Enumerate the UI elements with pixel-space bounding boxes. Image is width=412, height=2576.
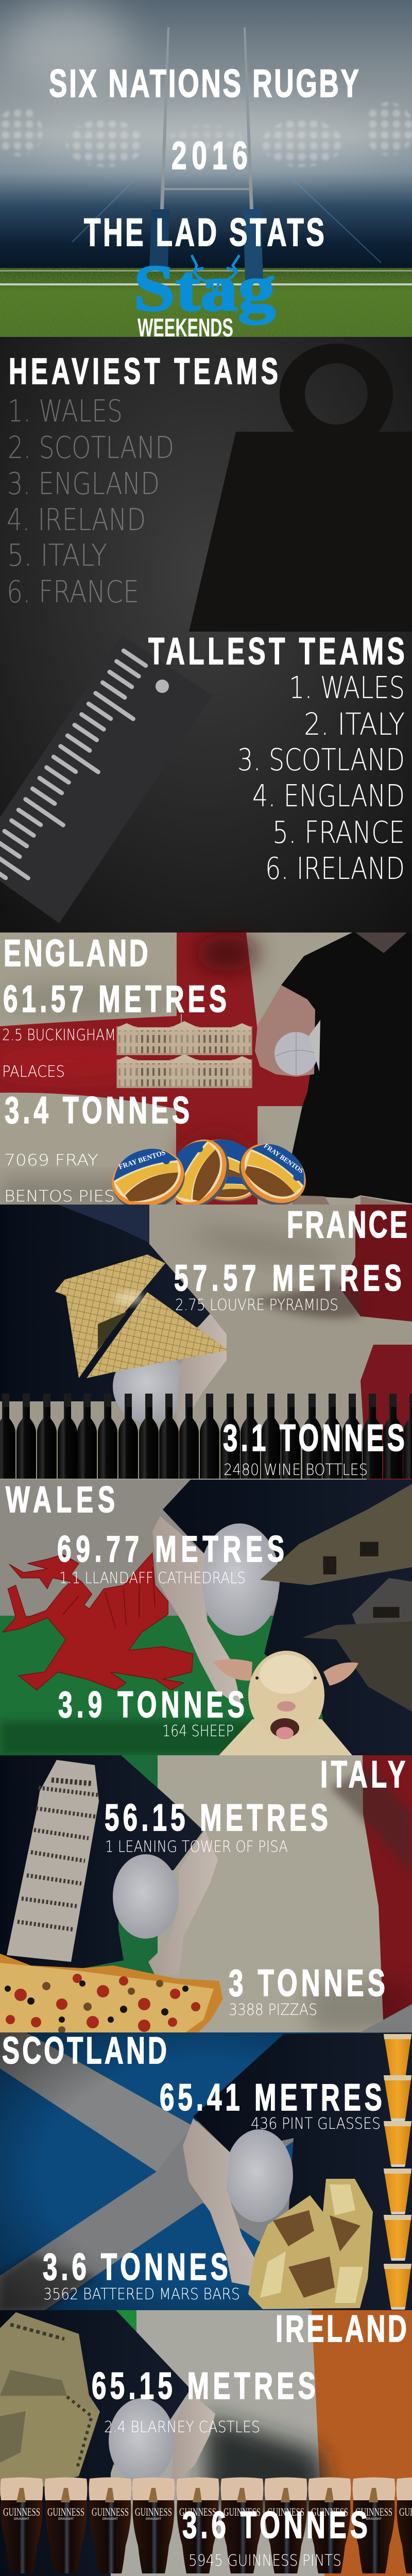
stat: height: 65.15 METRES — [92, 2365, 316, 2407]
comparison text: pyramids: 2.75 LOUVRE PYRAMIDS — [175, 1296, 338, 1314]
icon: guinness pints row: GUINNESS — [224, 2505, 261, 2518]
title: the lad stats: THE LAD STATS — [84, 211, 324, 254]
rugby player — [0, 2310, 215, 2576]
panel: heaviest and tallest teams — [0, 337, 412, 933]
stat: weight: 3.9 TONNES — [58, 1684, 245, 1725]
panel: wales — [0, 1479, 412, 1755]
icon: buckingham palaces — [116, 1014, 252, 1088]
title: six nations rugby: SIX NATIONS RUGBY — [49, 62, 359, 105]
rugby player — [183, 2032, 412, 2310]
rugby player — [0, 1205, 227, 1437]
stat: height: 61.57 METRES — [3, 978, 227, 1020]
icon: guinness pints row: DRAUGHT — [102, 2518, 118, 2521]
title: 2016: 2016 — [171, 134, 248, 177]
icon: llandaff cathedrals — [260, 1484, 412, 1712]
panel: hero stadium header — [0, 0, 412, 342]
comparison text: castles: 2.4 BLARNEY CASTLES — [104, 2418, 260, 2436]
list: heaviest teams ranking: 1. WALES — [8, 393, 123, 429]
panel: england — [0, 933, 412, 1219]
panel: italy — [0, 1754, 412, 2033]
comparison text: palaces — [2, 1026, 116, 1081]
icon: guinness pints row: GUINNESS — [355, 2505, 392, 2518]
list: heaviest teams ranking: 2. SCOTLAND — [8, 430, 174, 465]
panel: ireland — [0, 2308, 412, 2576]
icon: battered mars bars — [248, 2179, 373, 2309]
icon: guinness pints row: GUINNESS — [311, 2505, 348, 2518]
stat: height: 69.77 METRES — [57, 1529, 284, 1569]
list: heaviest teams ranking: 6. FRANCE — [7, 574, 139, 609]
heading: heaviest teams: HEAVIEST TEAMS — [9, 351, 278, 392]
list: heaviest teams ranking: 5. ITALY — [7, 537, 107, 573]
icon: pizza — [0, 1954, 223, 2033]
icon: guinness pints row — [0, 2477, 412, 2573]
panel: scotland — [0, 2004, 412, 2310]
icon: guinness pints row: GUINNESS — [267, 2505, 304, 2518]
comparison text: mars bars: 3562 BATTERED MARS BARS — [43, 2285, 240, 2303]
icon: fray bentos pies — [105, 1129, 317, 1219]
rugby player — [152, 1480, 412, 1755]
icon: sheep — [213, 1651, 358, 1755]
icon: leaning tower of pisa — [7, 1760, 99, 1962]
icon: wine bottles row — [0, 1394, 412, 1479]
icon: kettlebell weight silhouette — [189, 344, 412, 632]
heading: england: ENGLAND — [4, 933, 148, 974]
comparison text: sheep: 164 SHEEP — [162, 1722, 234, 1740]
comparison text: pizzas: 3388 PIZZAS — [229, 2001, 317, 2019]
comparison text: wine bottles: 2480 WINE BOTTLES — [224, 1461, 368, 1479]
stat: height: 56.15 METRES — [105, 1797, 328, 1839]
stat: weight: 3.4 TONNES — [5, 1090, 190, 1131]
heading: ireland: IRELAND — [276, 2308, 407, 2350]
comparison text: pies: 7069 FRAY — [4, 1151, 98, 1170]
rugby goal posts — [149, 27, 263, 281]
dark background — [0, 337, 412, 933]
grass pitch — [0, 268, 412, 337]
england flag background — [0, 933, 412, 1205]
comparison text: guinness pints: 5945 GUINNESS PINTS — [188, 2552, 341, 2570]
icon: blarney castles — [0, 2312, 100, 2496]
stat: weight: 3.1 TONNES — [223, 1417, 405, 1459]
logo: stag weekends: WEEKENDS — [138, 313, 233, 342]
heading: wales: WALES — [6, 1479, 115, 1520]
italy flag background — [0, 1755, 412, 2032]
icon: guinness pints row: GUINNESS — [92, 2505, 129, 2518]
icon: guinness pints row: DRAUGHT — [58, 2518, 74, 2521]
comparison text: palaces: 2.5 BUCKINGHAM — [2, 1026, 116, 1044]
icon: ruler — [0, 635, 212, 923]
stat: weight: 3.6 TONNES — [182, 2504, 368, 2546]
icon: fray bentos pies: FRAY BENTOS — [263, 1142, 305, 1175]
icon: welsh dragon — [3, 1553, 193, 1690]
rugby player — [255, 933, 412, 1205]
list: heaviest teams ranking: 3. ENGLAND — [7, 466, 160, 501]
icon: guinness pints row: GUINNESS — [3, 2505, 40, 2518]
comparison text: tower: 1 LEANING TOWER OF PISA — [105, 1838, 288, 1856]
icon: pint glasses stack — [384, 2034, 411, 2310]
list: heaviest teams ranking: 4. IRELAND — [7, 502, 146, 537]
panel: france — [0, 1204, 412, 1480]
scotland flag background — [0, 2004, 412, 2310]
icon: louvre pyramids — [55, 1255, 229, 1378]
france flag background — [0, 1205, 412, 1480]
stat: height: 57.57 METRES — [174, 1258, 402, 1298]
icon: guinness pints row: GUINNESS — [47, 2505, 84, 2518]
stat: weight: 3.6 TONNES — [43, 2246, 228, 2288]
heading: italy: ITALY — [320, 1754, 405, 1795]
ireland flag background — [0, 2310, 412, 2576]
comparison text: pint glasses: 436 PINT GLASSES — [251, 2115, 381, 2133]
rugby player — [0, 1755, 218, 1975]
stat: height: 65.41 METRES — [160, 2077, 382, 2119]
icon: guinness pints row: GUINNESS — [135, 2505, 172, 2518]
comparison text: palaces: PALACES — [2, 1063, 65, 1081]
icon: guinness pints row: DRAUGHT — [366, 2518, 382, 2521]
comparison text: cathedrals: 1.1 LLANDAFF CATHEDRALS — [59, 1569, 246, 1587]
heading: scotland: SCOTLAND — [2, 2030, 167, 2072]
logo: stag weekends: Stag — [133, 251, 276, 325]
wales flag background — [0, 1480, 412, 1755]
stadium sky background — [0, 0, 412, 270]
heading: tallest teams: TALLEST TEAMS — [148, 631, 405, 672]
list: tallest teams ranking — [237, 670, 405, 886]
icon: guinness pints row: DRAUGHT — [146, 2518, 161, 2521]
stat: weight: 3 TONNES — [229, 1962, 385, 2004]
comparison text: pies: BENTOS PIES — [4, 1188, 115, 1206]
icon: fray bentos pies: FRAY BENTOS — [118, 1148, 166, 1171]
icon: guinness pints row: GUINNESS — [179, 2505, 216, 2518]
list: heaviest teams ranking — [7, 393, 174, 609]
comparison text: pies — [4, 1151, 115, 1206]
icon: guinness pints row: DRAUGHT — [14, 2518, 29, 2521]
heading: france: FRANCE — [287, 1204, 407, 1246]
